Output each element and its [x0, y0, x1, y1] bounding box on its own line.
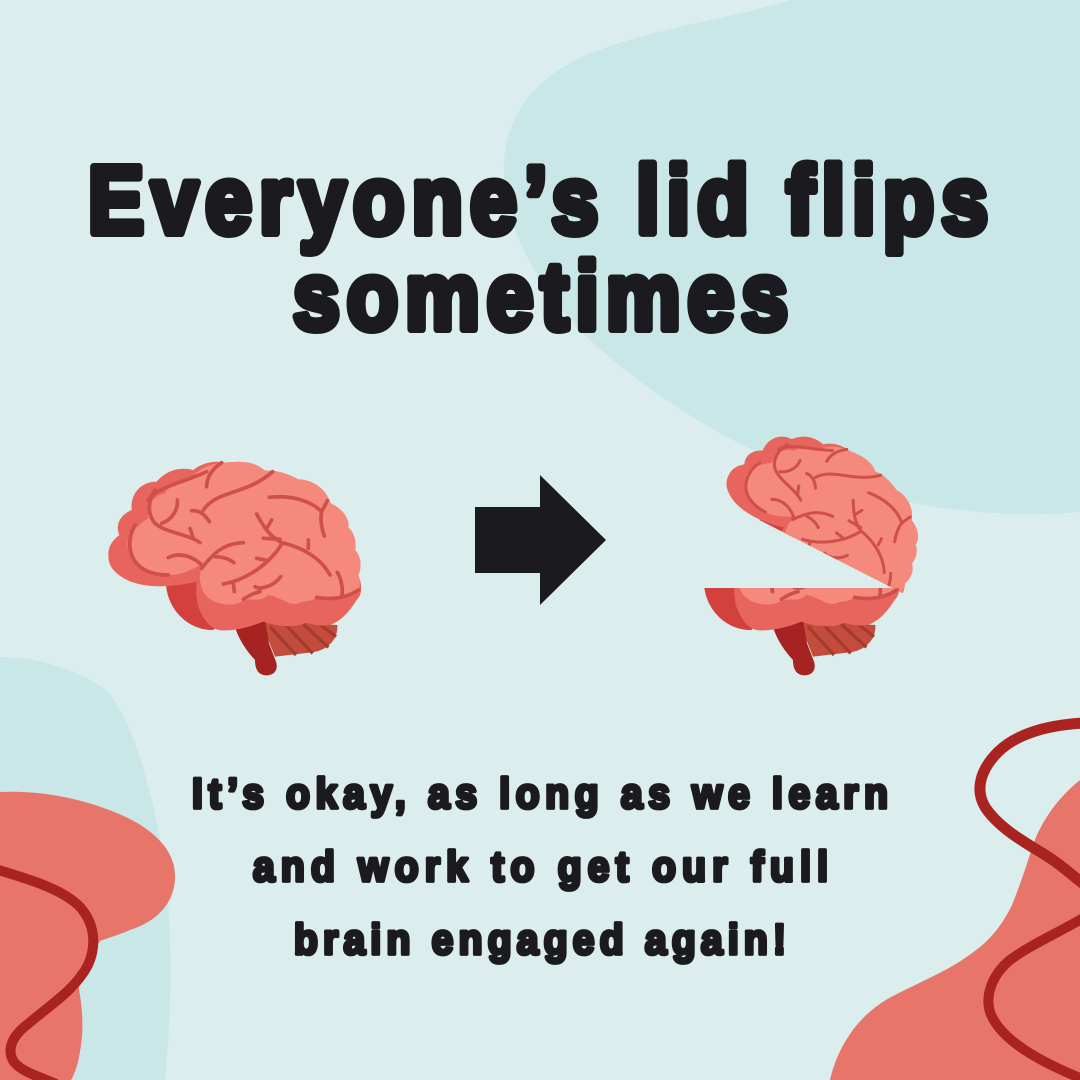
- title: sometimes: [293, 243, 788, 350]
- body text: [192, 769, 888, 963]
- blob: top right: [504, 0, 1080, 514]
- title: [88, 147, 988, 350]
- title: Everyone’s lid flips: [88, 147, 988, 254]
- squiggle: bottom right upper: [980, 723, 1080, 885]
- body text: brain engaged again!: [294, 915, 786, 963]
- blob: bottom left pale: [0, 657, 170, 1080]
- blob: bottom left coral: [0, 792, 175, 1080]
- icon: whole brain: [108, 462, 361, 675]
- blob: bottom right coral: [830, 780, 1080, 1080]
- icon: flipped-lid brain: [704, 436, 918, 676]
- arrow: [475, 475, 606, 605]
- body text: It’s okay, as long as we learn: [192, 769, 888, 817]
- squiggle: bottom left: [0, 869, 93, 1080]
- squiggle: bottom right lower: [988, 917, 1080, 1080]
- body text: and work to get our full: [253, 842, 828, 890]
